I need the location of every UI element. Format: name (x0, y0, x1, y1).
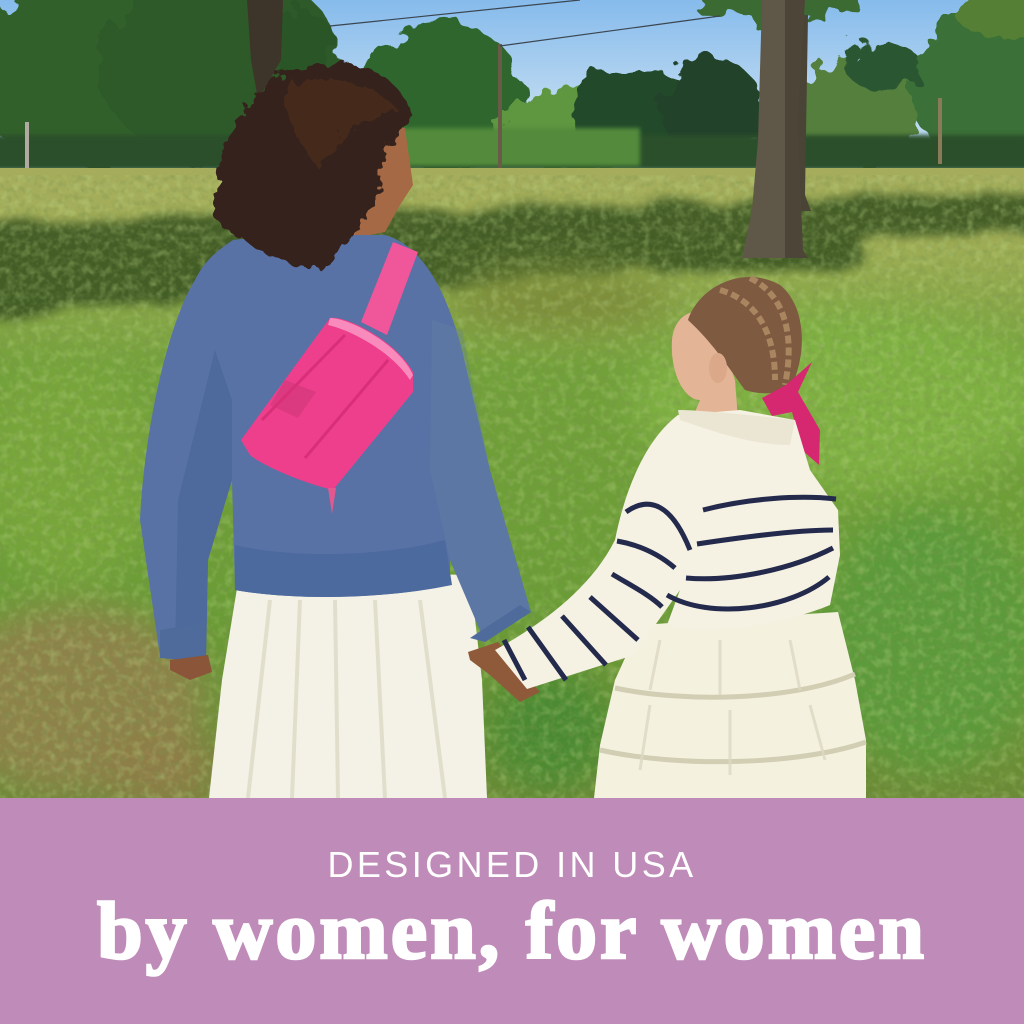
woman (140, 63, 540, 798)
sweater shading (175, 350, 232, 660)
subheading: DESIGNED IN USA (327, 844, 697, 885)
strap (361, 242, 418, 335)
poles and wires (25, 0, 942, 176)
clasped hands (468, 642, 540, 702)
tree shadows on the grass (0, 190, 1024, 322)
grass texture (0, 175, 1024, 798)
pink belt bag (241, 318, 413, 490)
sky (0, 0, 1024, 175)
bright grass patches and dry lower-left ground (0, 270, 1024, 810)
pink ribbon (762, 362, 820, 465)
girl (495, 277, 866, 798)
face and neck (345, 125, 413, 240)
neck and face (672, 310, 738, 420)
tree trunks (247, 0, 811, 258)
grass field (0, 168, 1024, 798)
striped sweater (495, 410, 840, 689)
sweater (140, 235, 531, 660)
skirt (209, 570, 487, 798)
tiered tulle skirt (594, 612, 866, 798)
photo: woman and girl walking hand in hand in a park (0, 0, 1024, 798)
woman's left hand (170, 655, 212, 680)
distant hedge line (0, 135, 1024, 170)
background trees (0, 0, 1024, 170)
curly hair (216, 63, 412, 268)
sweater stripes (504, 497, 836, 680)
banner: purple caption strip (0, 798, 1024, 1024)
braided hair (688, 277, 802, 393)
ear (709, 353, 727, 383)
headline: by women, for women (97, 885, 927, 976)
